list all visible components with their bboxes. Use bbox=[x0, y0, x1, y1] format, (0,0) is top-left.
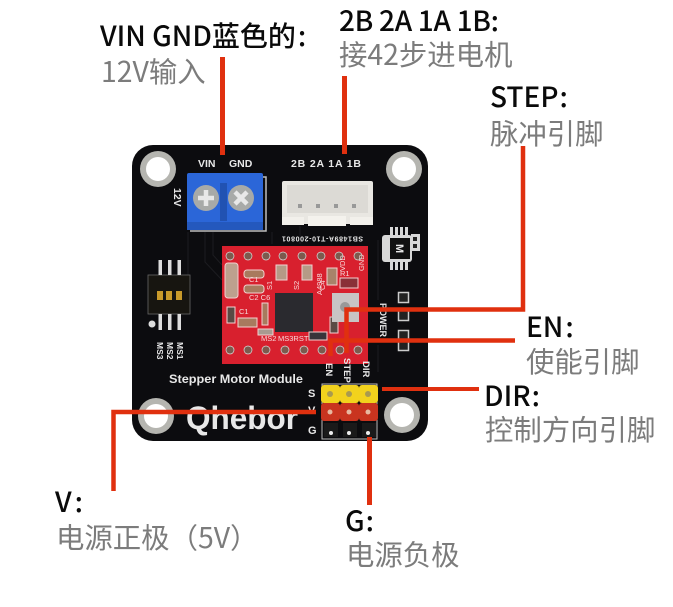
motor icon: M bbox=[393, 244, 405, 253]
motor icon bbox=[382, 227, 420, 270]
arrow: STEP leader bbox=[346, 146, 523, 353]
heading: motor pins: 2B 2A 1A 1B: bbox=[339, 0, 499, 40]
white motor connector bbox=[282, 181, 373, 226]
pin labels: DIR bbox=[360, 361, 371, 378]
arrow: motor leader bbox=[342, 76, 347, 154]
pin labels: G bbox=[308, 425, 317, 437]
pin labels bbox=[308, 358, 371, 437]
red driver module: C1 bbox=[239, 307, 249, 316]
text: negative supply: 电源负极 bbox=[346, 533, 460, 574]
red driver module: C2 C6 bbox=[249, 293, 270, 302]
arrow: V leader bbox=[114, 412, 316, 491]
red driver module: R1 bbox=[340, 269, 350, 278]
red driver module: S2 bbox=[292, 281, 301, 290]
blue screw terminal bbox=[187, 173, 266, 231]
DIP switch labels: MS1 bbox=[175, 342, 185, 360]
icon: mounting hole bottom left bbox=[138, 398, 174, 434]
power terminal labels: VIN bbox=[198, 158, 216, 170]
red driver module: MS2 bbox=[261, 334, 276, 343]
text: direction pin: 控制方向引脚 bbox=[485, 408, 655, 449]
panel: circuit board bbox=[132, 145, 428, 441]
heading: V: V: bbox=[54, 481, 83, 521]
text: motor connection: 接42步进电机 bbox=[339, 33, 512, 74]
heading: DIR: DIR: bbox=[484, 375, 540, 415]
panel: circuit board: GND bbox=[229, 158, 253, 170]
DIP switch bbox=[148, 260, 190, 330]
pin labels: S bbox=[308, 388, 315, 400]
DIP switch labels bbox=[155, 342, 185, 360]
DIP switch labels: MS3 bbox=[155, 342, 165, 360]
pin labels: EN bbox=[323, 363, 334, 376]
red driver module: MS3RST bbox=[278, 334, 309, 343]
red driver module: C4 bbox=[318, 280, 327, 290]
text: 12V input: 12V输入 bbox=[101, 50, 206, 91]
DIP switch labels: MS2 bbox=[165, 342, 175, 360]
arrow: EN leader bbox=[330, 340, 515, 356]
heading: STEP: STEP: bbox=[490, 76, 568, 116]
red driver module: S1 bbox=[265, 281, 274, 290]
heading: VIN GND: VIN GND蓝色的: bbox=[99, 15, 306, 55]
text: positive supply: 电源正极（5V） bbox=[56, 516, 258, 557]
red driver module: A4988 bbox=[315, 273, 324, 295]
arrow: G leader bbox=[367, 437, 372, 505]
motor connector labels: 2B 2A 1A 1B bbox=[291, 158, 361, 170]
pin labels: V bbox=[308, 405, 316, 417]
voltage label: 12V bbox=[171, 188, 183, 207]
icon: mounting hole bottom right bbox=[384, 397, 420, 433]
text: enable pin: 使能引脚 bbox=[526, 340, 640, 381]
text: pulse pin: 脉冲引脚 bbox=[490, 112, 604, 153]
arrow: VIN GND leader bbox=[220, 57, 225, 155]
power indicator: POWER bbox=[378, 303, 388, 338]
heading: EN: EN: bbox=[526, 306, 574, 346]
arrow: DIR leader bbox=[382, 387, 479, 391]
heading: G: G: bbox=[345, 500, 374, 540]
red driver module: VDD bbox=[338, 255, 347, 271]
icon: mounting hole top left bbox=[140, 151, 176, 187]
power indicator bbox=[378, 292, 408, 350]
module title: Stepper Motor Module bbox=[169, 374, 303, 386]
red driver module: SB1489A-T10-200801 bbox=[282, 234, 363, 242]
red driver module bbox=[222, 234, 368, 364]
pin header bbox=[321, 384, 378, 439]
red driver module: C1 bbox=[249, 275, 259, 284]
brand logo: Qhebor bbox=[186, 400, 298, 436]
pin labels: STEP bbox=[341, 358, 352, 383]
red driver module: GND bbox=[357, 254, 366, 271]
icon: mounting hole top right bbox=[386, 151, 422, 187]
